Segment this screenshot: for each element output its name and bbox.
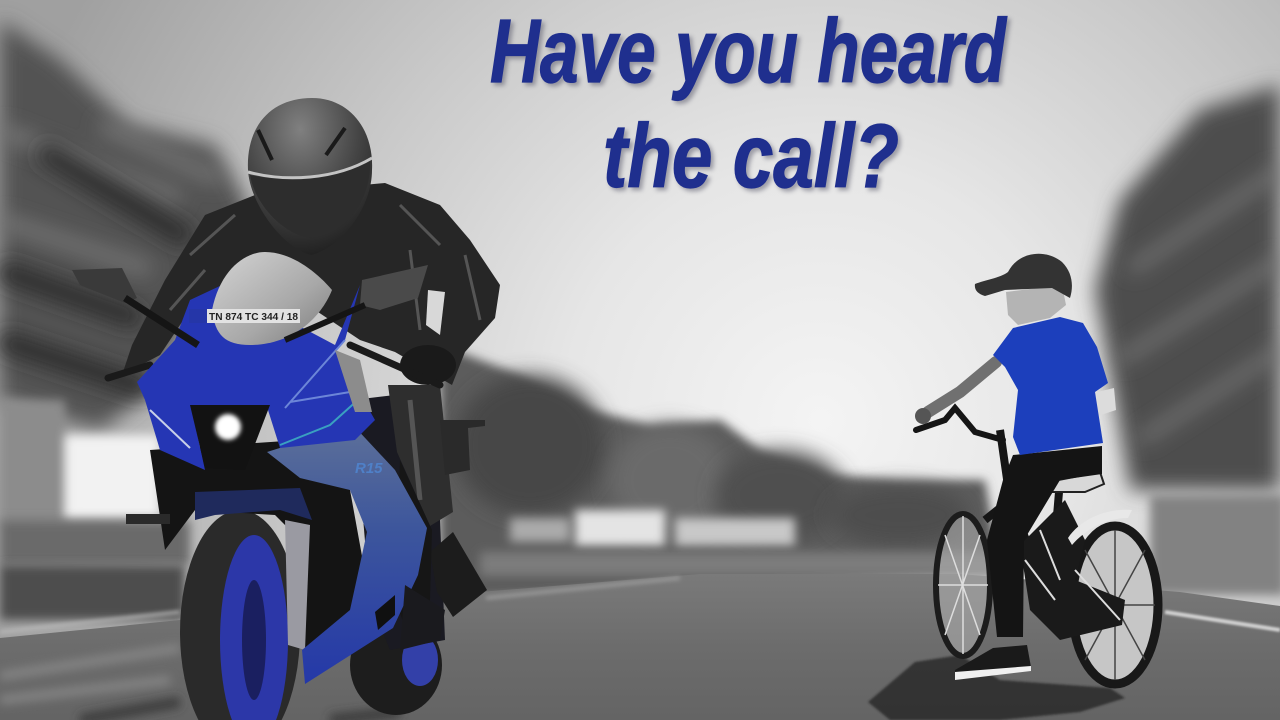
bicycle seat [1048, 472, 1104, 492]
bicycle frame mass [1020, 500, 1125, 640]
boy right arm [1097, 388, 1116, 416]
boy shadow on road [868, 655, 1125, 720]
lower blue fairing [267, 425, 427, 684]
bicycle rear fender [1068, 510, 1132, 545]
windscreen [212, 252, 332, 345]
title line 2: the call? [603, 107, 899, 207]
background: distant trees and buildings [440, 345, 1000, 600]
boy [915, 254, 1116, 680]
boy trousers [987, 446, 1102, 637]
road [0, 574, 1280, 720]
rider glove [400, 345, 456, 385]
side transparent panel [335, 350, 372, 412]
boy face [1006, 285, 1066, 325]
right mirror [285, 265, 428, 340]
handlebar [108, 345, 440, 385]
rider jacket [122, 183, 500, 385]
front wheel tyre [180, 510, 300, 720]
motorcycle body [72, 252, 445, 720]
bicycle rear wheel [1072, 526, 1158, 684]
title [490, 2, 1008, 207]
headlight housing [190, 405, 270, 470]
front fender [195, 488, 312, 520]
background: right blurred tree [1095, 85, 1280, 595]
left mirror [72, 268, 198, 345]
left streak peg [126, 514, 170, 524]
boy hand [915, 408, 931, 424]
title line 1: Have you heard [490, 2, 1008, 102]
bicycle frame [985, 430, 1120, 605]
bicycle front wheel [936, 514, 990, 656]
boy shoe [955, 645, 1031, 680]
bicycle [916, 408, 1158, 684]
number plate [189, 309, 300, 323]
headlight glow [215, 414, 241, 440]
bicycle handlebar [916, 408, 1003, 440]
R15 badge: R15 [355, 460, 383, 477]
motorcycle rear wheel [350, 615, 442, 715]
background: left blurred tree [0, 20, 250, 620]
boy left arm [928, 362, 996, 412]
number plate: TN 874 TC 344 / 18 [209, 312, 298, 323]
rider leg and boot [388, 385, 487, 640]
upper blue fairing [137, 285, 375, 470]
helmet [248, 98, 372, 255]
lower dark frame and fork [150, 440, 370, 670]
rider [122, 98, 500, 650]
gap between arm and torso [426, 290, 445, 335]
bike mid section behind leg [353, 395, 445, 650]
boy blue shirt [993, 317, 1108, 455]
front wheel blue rim [220, 535, 288, 720]
boy cap [975, 254, 1072, 298]
